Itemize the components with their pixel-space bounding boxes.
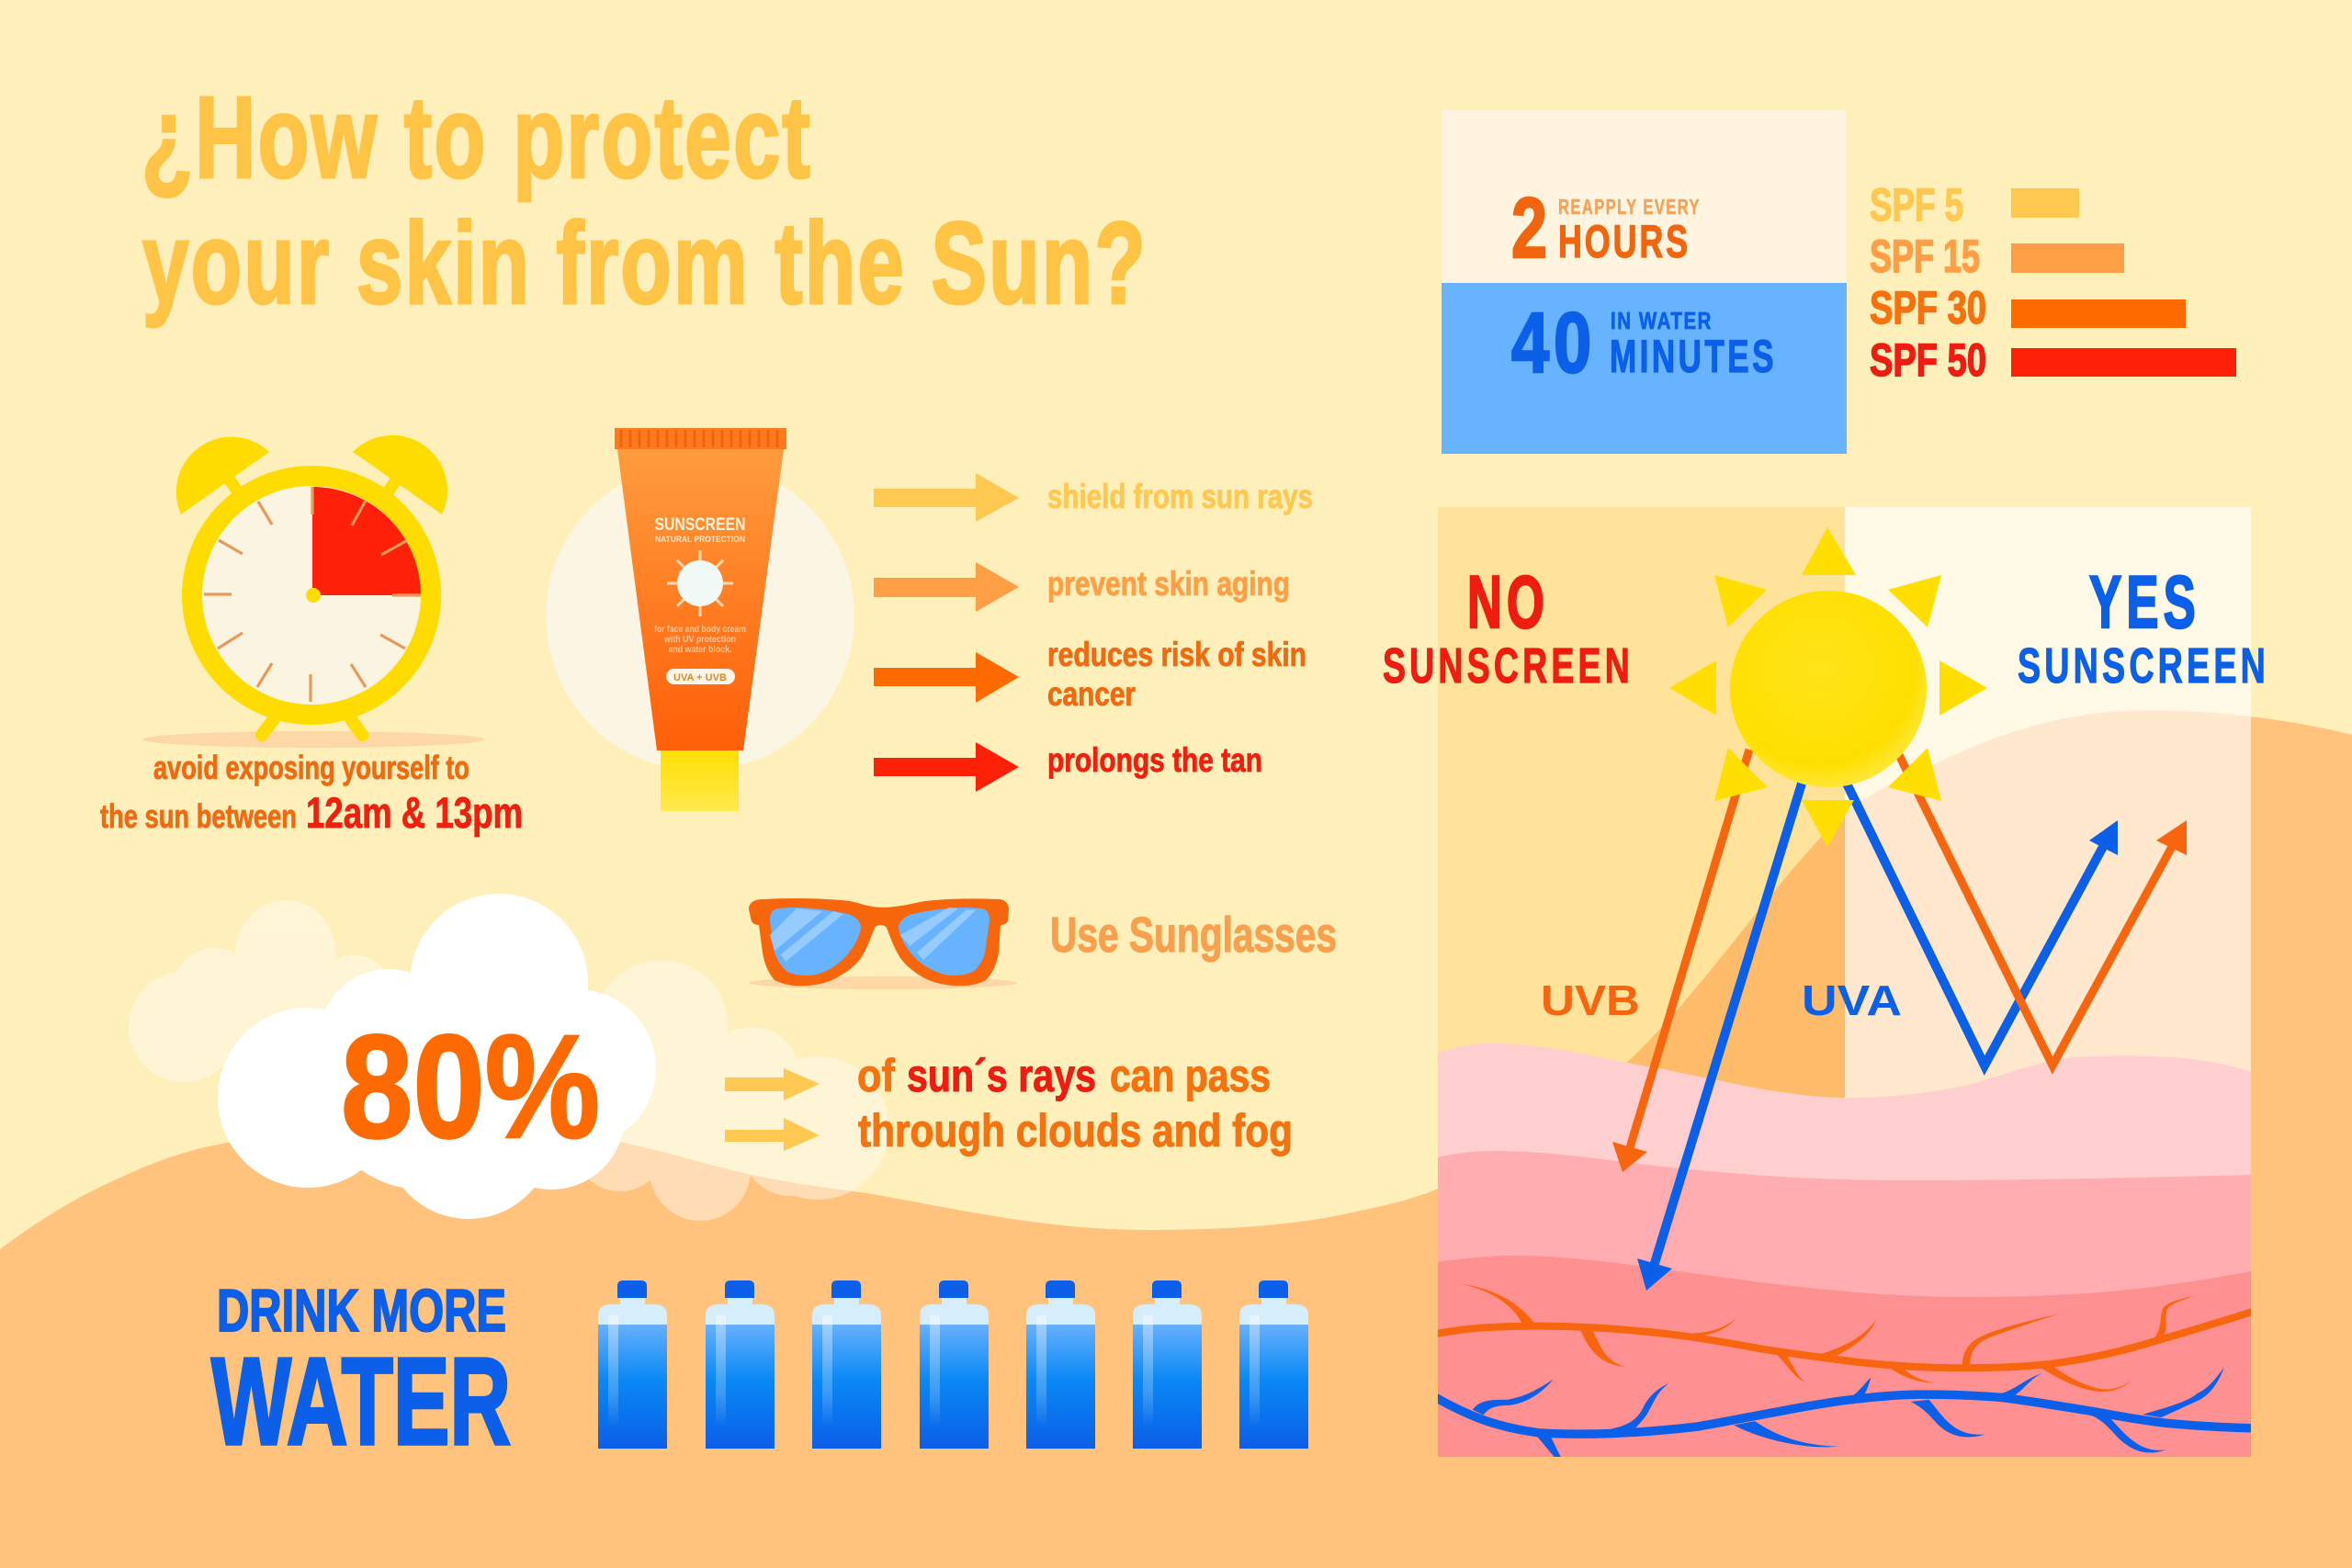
reapply panel: [1442, 110, 1847, 283]
cloud: pale right: [574, 960, 889, 1221]
chart: SPF bars: SPF 50: [1870, 334, 1986, 386]
cloud: main white: [218, 894, 656, 1219]
sunscreen tube: with UV protection: [663, 635, 736, 645]
text: prevent skin aging: prevent skin aging: [1047, 565, 1290, 603]
text: reduces risk of skin cancer: [1047, 636, 1306, 713]
text: drink more water: WATER: [211, 1332, 511, 1471]
in water panel: IN WATER: [1611, 307, 1713, 334]
right half background: [1845, 507, 2251, 1150]
sunscreen tube: for face and body cream: [654, 625, 746, 635]
text: shield from sun rays: shield from sun rays: [1047, 478, 1313, 515]
title: your skin from the Sun?: [142, 198, 1148, 328]
sunscreen tube: [546, 428, 854, 811]
sunscreen tube: NATURAL PROTECTION: [655, 535, 745, 545]
reapply panel: 2: [1511, 180, 1547, 276]
arrow: UVA reflected: [1847, 784, 2118, 1066]
icon: sunglasses: [749, 898, 1017, 989]
reapply panel: HOURS: [1558, 216, 1690, 267]
clock caption: 12am & 13pm: [306, 788, 523, 837]
label: YES sunscreen: YES: [2089, 561, 2200, 644]
icon: alarm clock: [142, 435, 484, 748]
orange hill: [0, 710, 2352, 1568]
chart: SPF bars: SPF 5: [1870, 179, 1963, 231]
text: prolongs the tan: prolongs the tan: [1047, 741, 1262, 779]
label: NO sunscreen: [1383, 561, 1634, 694]
text: drink more water: [211, 1277, 511, 1471]
chart: SPF bars: [1870, 179, 2236, 386]
in water panel: 40: [1511, 295, 1596, 390]
sunscreen tube: UVA + UVB: [673, 672, 727, 683]
label: NO sunscreen: SUNSCREEN: [1383, 638, 1634, 694]
label: UVA: UVA: [1802, 976, 1902, 1024]
clock caption: [100, 749, 523, 837]
text: use sunglasses: Use Sunglasses: [1050, 908, 1337, 963]
arrow: reduces risk: [874, 652, 1019, 703]
text: sun's rays through clouds: sun´s rays: [907, 1050, 1096, 1101]
text: sun's rays through clouds: of: [857, 1050, 895, 1101]
orange vein: [1433, 1283, 2256, 1392]
in water panel: [1442, 283, 1847, 454]
cloud: pale left: [129, 900, 395, 1089]
arrow: UVA no sunscreen: [1637, 784, 1802, 1291]
icon: water bottles: [598, 1280, 1308, 1449]
text: sun's rays through clouds: can pass: [1110, 1050, 1271, 1101]
reapply panel: REAPPLY EVERY: [1558, 195, 1701, 219]
clock caption: the sun between: [100, 797, 297, 835]
chart: SPF bars: SPF 15: [1870, 231, 1980, 282]
arrow: UVB no sunscreen: [1612, 750, 1749, 1172]
text: 80%: 80%: [341, 1004, 600, 1168]
arrow: shield from sun rays: [874, 473, 1019, 522]
arrow: UVB reflected: [1899, 755, 2187, 1066]
title: [141, 73, 1148, 328]
arrows: clouds: [725, 1068, 820, 1151]
sunscreen tube: and water block.: [669, 645, 732, 655]
text: sun's rays through clouds: [857, 1050, 1293, 1156]
text: drink more water: DRINK MORE: [217, 1277, 506, 1344]
label: NO sunscreen: NO: [1467, 561, 1549, 644]
text: sun's rays through clouds: through clouds and fog: [858, 1105, 1293, 1156]
arrow: prevent skin aging: [874, 562, 1019, 612]
in water panel: MINUTES: [1610, 331, 1777, 382]
title: ¿How to protect: [141, 73, 812, 202]
label: UVB: UVB: [1541, 976, 1640, 1024]
left half background: [1438, 507, 1845, 1098]
panel: sunscreen comparison: [220, 507, 2264, 1457]
skin layers: [1438, 1043, 2251, 1457]
text: reduces risk of skin cancer: cancer: [1047, 675, 1136, 713]
blue vein: [1433, 1367, 2256, 1457]
chart: SPF bars: SPF 30: [1870, 282, 1986, 333]
text: reduces risk of skin cancer: reduces risk of skin: [1047, 636, 1306, 673]
arrow: prolongs the tan: [874, 742, 1019, 792]
sunscreen tube: SUNSCREEN: [654, 515, 746, 535]
clock caption: avoid exposing yourself to: [153, 749, 469, 786]
icon: sun: [1669, 527, 1987, 847]
label: YES sunscreen: [2018, 561, 2269, 694]
